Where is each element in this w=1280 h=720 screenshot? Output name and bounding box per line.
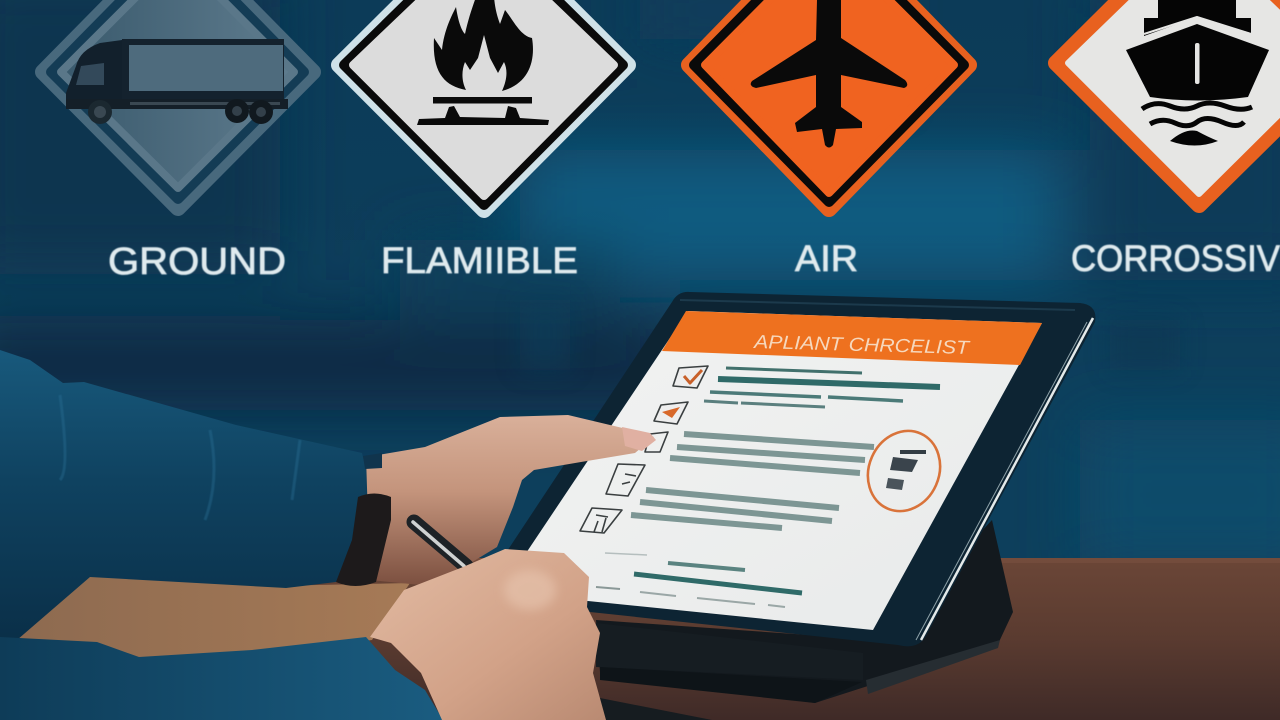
upper hand	[366, 415, 654, 585]
wooden table	[0, 558, 1280, 720]
checkboxes	[580, 366, 708, 533]
tablet body	[480, 292, 1095, 646]
sign: corrosive ship	[1056, 0, 1280, 205]
stylus pen	[413, 522, 466, 566]
hazard stamp circle	[855, 419, 953, 523]
fingernail	[622, 427, 656, 451]
lower sleeve	[0, 637, 443, 720]
label: ground: GROUND	[108, 241, 286, 283]
tablet stand	[596, 520, 1013, 720]
label: flammable: FLAMIIBLE	[381, 240, 578, 281]
wrist strap	[336, 494, 391, 586]
sign: ground	[43, 0, 313, 208]
icon: flame	[417, 0, 549, 125]
tan table section at left	[17, 574, 410, 660]
checklist header: APLIANT CHRCELIST	[753, 332, 971, 359]
checklist header	[662, 311, 1042, 365]
icon: airplane	[751, 0, 907, 148]
icon: truck	[66, 39, 288, 124]
upper sleeve	[0, 350, 382, 642]
sign: flammable	[339, 0, 628, 210]
sign: air	[689, 0, 969, 209]
label: air: AIR	[795, 238, 858, 279]
icon: ship	[1126, 0, 1269, 146]
tablet screen	[500, 311, 1042, 630]
checklist lines	[596, 368, 940, 607]
lower hand	[370, 549, 606, 720]
